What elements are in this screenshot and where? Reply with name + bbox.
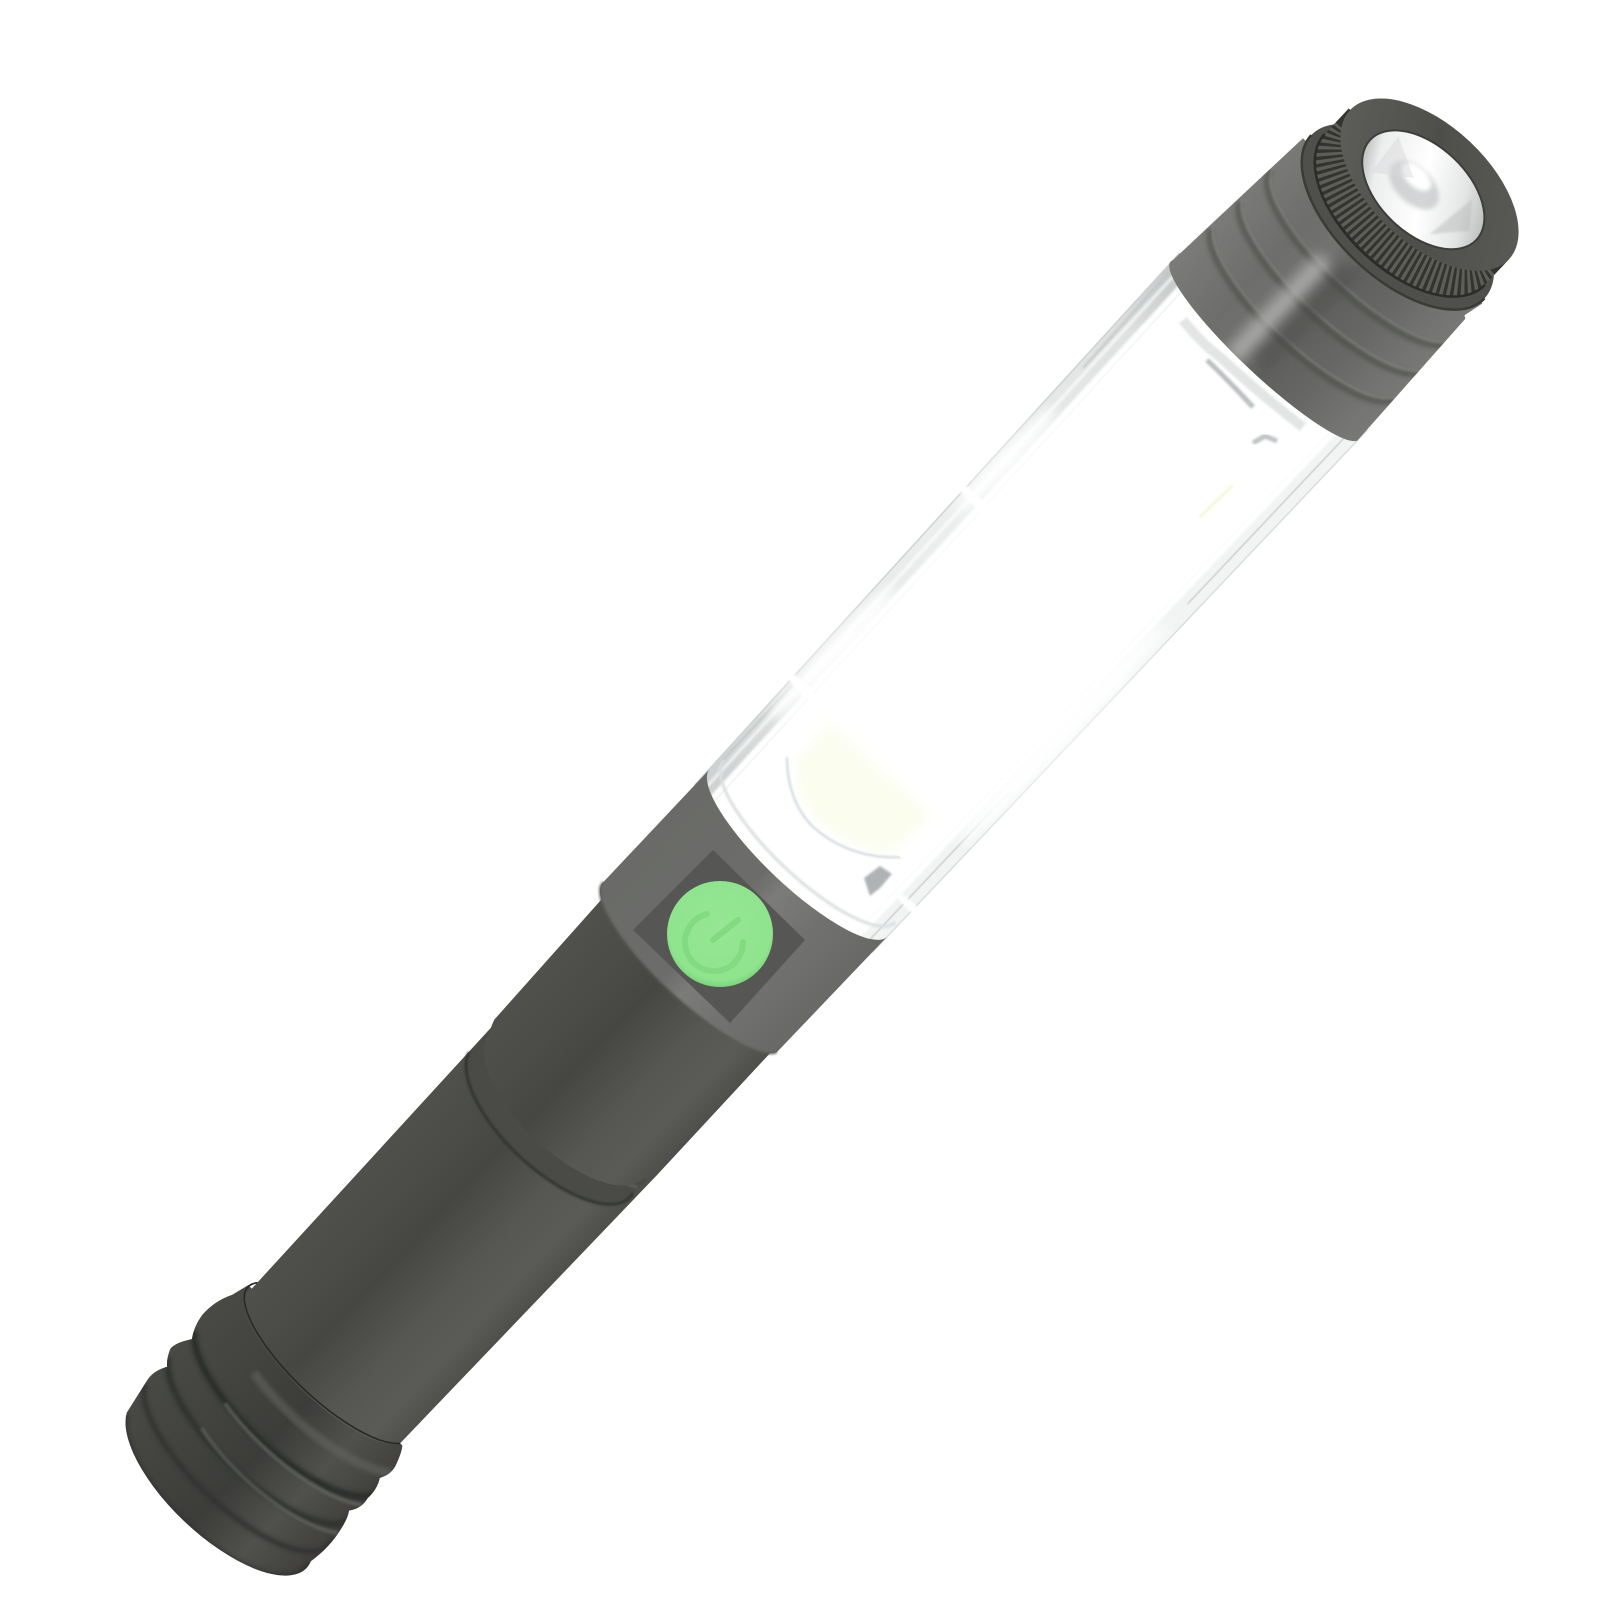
COB LED panel interior: upper end — [1183, 320, 1303, 517]
COB LED panel interior: lower end — [787, 722, 934, 896]
bezel face — [1310, 67, 1549, 302]
power button — [667, 881, 773, 987]
switch housing — [580, 769, 887, 1074]
upper handle — [449, 835, 828, 1217]
reflector and lens — [1339, 106, 1508, 273]
power icon — [685, 914, 743, 971]
focus ring with knurling — [1300, 98, 1519, 311]
torch head collar — [1169, 138, 1482, 442]
window lens — [686, 253, 1367, 954]
switch plate — [633, 850, 805, 1023]
lower handle — [221, 1023, 657, 1466]
tail cap — [126, 1285, 402, 1576]
handle collar seam — [441, 1024, 654, 1231]
glare on window edges — [721, 395, 1236, 919]
tail seam — [223, 1280, 413, 1463]
